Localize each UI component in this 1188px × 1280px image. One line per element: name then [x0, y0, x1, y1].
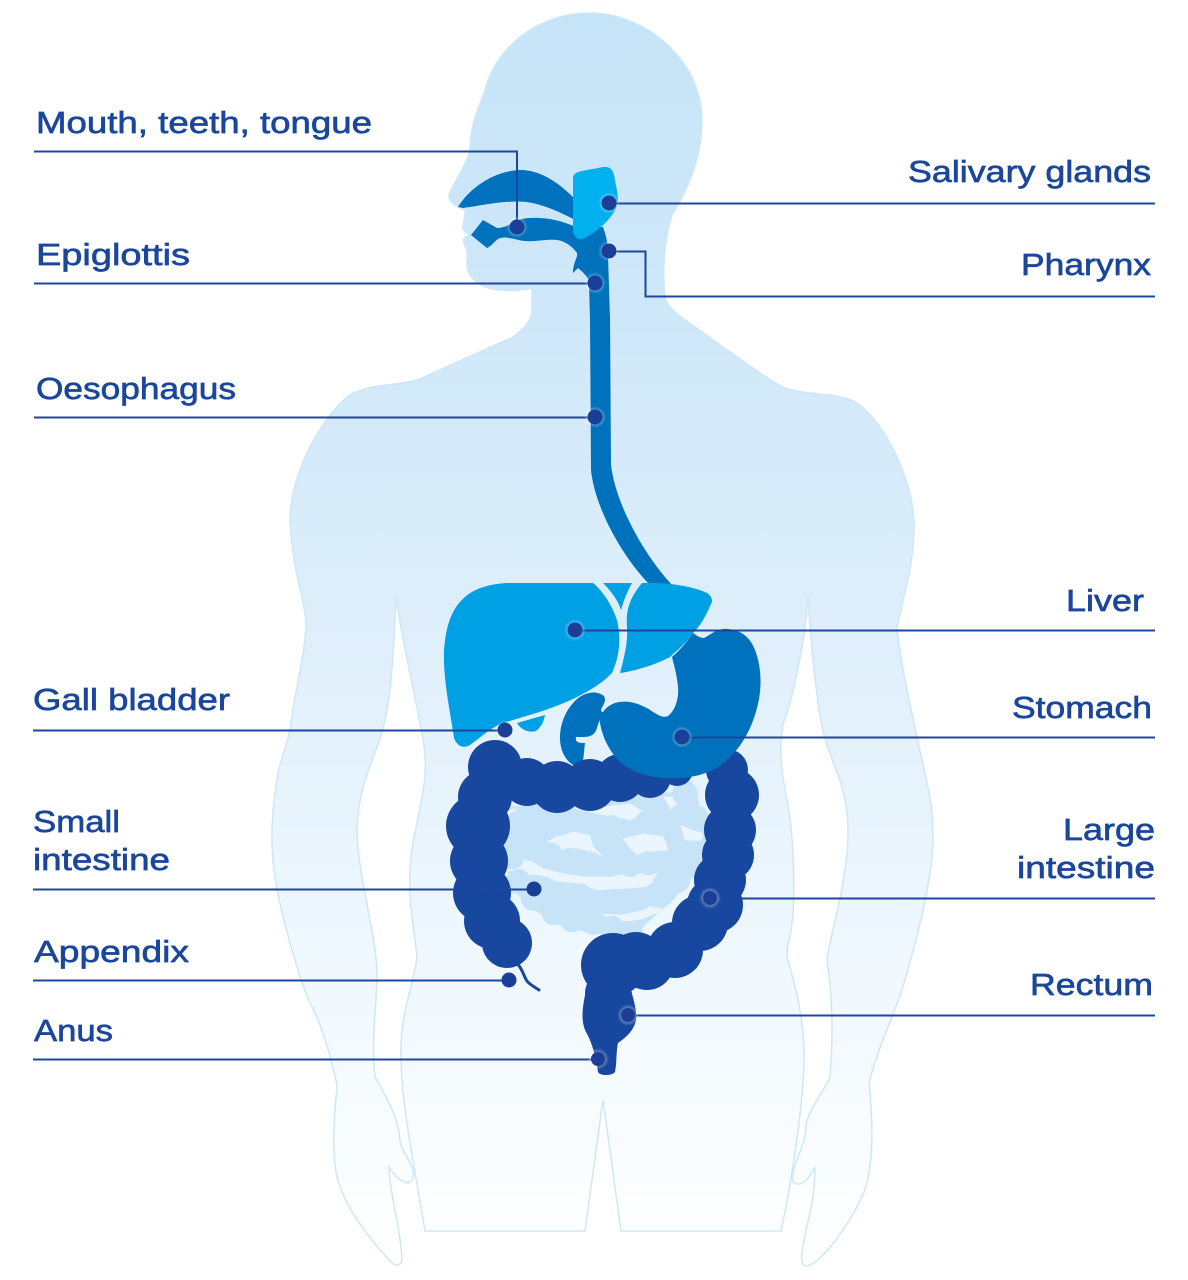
label: appendix: Appendix — [34, 934, 190, 969]
label: liver — [564, 583, 1155, 641]
pancreas and duodenum — [560, 692, 606, 765]
label: rectum: Rectum — [1030, 967, 1153, 1002]
label: appendix — [33, 934, 516, 988]
large intestine — [446, 740, 759, 1075]
salivary glands — [573, 167, 618, 239]
label: small intestine — [33, 804, 542, 896]
label: small intestine: intestine — [33, 842, 170, 877]
label: large intestine: Large — [1063, 812, 1155, 847]
label: large intestine — [699, 812, 1155, 909]
appendix — [517, 963, 539, 990]
label: anus — [33, 1013, 609, 1070]
label: oesophagus — [34, 371, 606, 428]
label: salivary glands: Salivary glands — [908, 154, 1151, 189]
human body silhouette — [272, 13, 933, 1266]
label: mouth, teeth, tongue: Mouth, teeth, tongue — [36, 105, 372, 140]
label: liver: Liver — [1066, 583, 1144, 618]
oesophagus — [590, 315, 672, 585]
gall bladder — [517, 715, 545, 732]
label: stomach: Stomach — [1012, 690, 1152, 725]
label: gall bladder — [33, 682, 515, 740]
label: anus: Anus — [34, 1013, 113, 1048]
label: stomach — [671, 690, 1155, 748]
label: epiglottis: Epiglottis — [36, 237, 190, 272]
label: mouth, teeth, tongue — [34, 105, 528, 238]
label: pharynx — [598, 240, 1155, 296]
label: pharynx: Pharynx — [1021, 247, 1152, 282]
label: salivary glands — [598, 154, 1155, 214]
small intestine — [499, 781, 709, 944]
label: rectum — [617, 967, 1155, 1026]
label: small intestine: Small — [33, 804, 120, 839]
label: gall bladder: Gall bladder — [33, 682, 230, 717]
mouth cavity and pharynx — [471, 218, 610, 320]
stomach — [600, 629, 761, 778]
label: large intestine: intestine — [1017, 850, 1155, 885]
liver — [444, 583, 712, 747]
palate — [458, 170, 575, 220]
label: epiglottis — [34, 237, 606, 294]
label: oesophagus: Oesophagus — [36, 371, 236, 406]
